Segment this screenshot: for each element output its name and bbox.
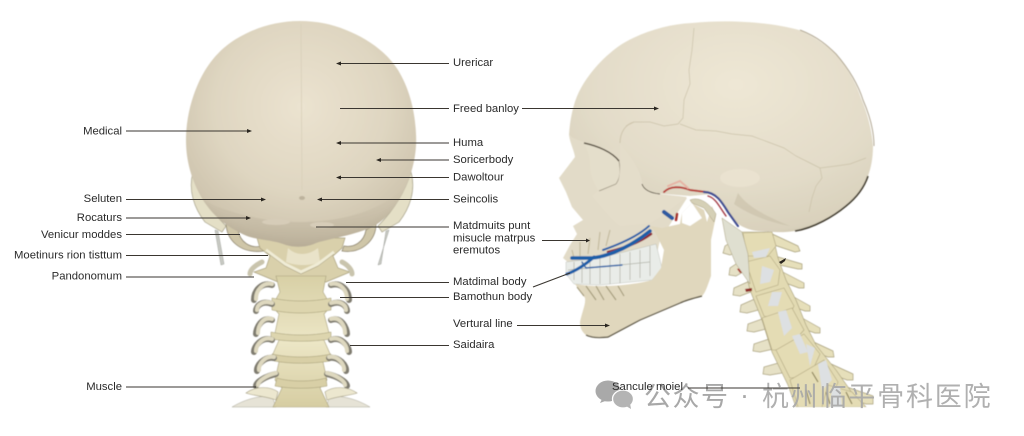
dark speckles at lower spine <box>806 372 852 404</box>
label: Medical: Medical <box>83 126 122 138</box>
left articular processes <box>722 244 782 376</box>
left transverse processes <box>246 284 278 400</box>
red vessel fragments <box>736 268 742 274</box>
label: Vertural line: Vertural line <box>453 318 513 330</box>
blood vessels <box>567 181 738 274</box>
vertebral column segments <box>740 232 862 407</box>
small arrow on spine <box>779 258 786 264</box>
label: Muscle: Muscle <box>86 381 122 393</box>
side view of skull with jaw, vessels and spine <box>559 21 874 407</box>
cervical spine, posterior view <box>232 276 370 407</box>
label: Rocaturs <box>77 212 251 224</box>
icon: wechat bubbles <box>596 380 634 409</box>
label: Soricerbody: Soricerbody <box>453 154 514 166</box>
watermark: 杭州临平骨科医院 <box>762 382 992 412</box>
vertebral column <box>272 276 331 407</box>
label: Seincolis: Seincolis <box>453 194 499 206</box>
intervertebral discs <box>272 298 331 313</box>
left labels, back view <box>14 126 268 393</box>
watermark text: 公众号 <box>644 382 730 412</box>
label: Rocaturs: Rocaturs <box>77 212 122 224</box>
right transverse processes <box>325 284 357 400</box>
spinous processes <box>765 232 873 404</box>
label: Urericar <box>336 57 493 69</box>
right styloid process <box>378 230 389 265</box>
skull, posterior view <box>186 21 416 247</box>
label: Moetinurs rion tisttum: Moetinurs rion tisttum <box>14 250 122 262</box>
label: Matdmuits punt misucle matrpus eremutos: eremutos <box>453 244 500 256</box>
label: Medical <box>83 126 252 138</box>
label: Pandonomum: Pandonomum <box>52 270 122 282</box>
label: Huma <box>336 137 484 149</box>
label: Matdimal body <box>346 273 570 288</box>
cervical spine, lateral view <box>723 232 873 407</box>
watermark <box>596 380 992 412</box>
watermark: · <box>740 380 749 410</box>
label: Huma: Huma <box>453 137 484 149</box>
label: Matdmuits punt misucle matrpus eremutos <box>316 220 590 256</box>
upper neck bone near the skull base <box>722 218 750 284</box>
label: Seluten <box>84 193 266 205</box>
label: Bamothun body: Bamothun body <box>453 291 532 303</box>
orbit <box>584 144 620 190</box>
label: Freed banloy: Freed banloy <box>453 103 519 115</box>
left mastoid strip <box>191 172 226 232</box>
left skull base loop <box>226 222 264 251</box>
label: Vertural line <box>453 318 610 330</box>
skull sutures <box>626 28 866 212</box>
shoulder arcs <box>232 396 276 407</box>
cheekbone <box>592 143 687 226</box>
label: Seincolis <box>317 194 499 206</box>
label: Saidaira: Saidaira <box>453 339 495 351</box>
label: Urericar: Urericar <box>453 57 493 69</box>
temporal ridge <box>620 122 634 143</box>
upper cervical vertebrae <box>250 238 352 282</box>
label: Venicur moddes: Venicur moddes <box>41 229 122 241</box>
label: Dawoltour <box>336 172 504 184</box>
label: Seluten: Seluten <box>84 193 122 205</box>
back view of skull and neck <box>186 21 416 407</box>
label: Matdmuits punt misucle matrpus eremutos: Matdmuits punt <box>453 220 531 232</box>
maxilla root lines <box>572 230 610 258</box>
label: Sancule moiel: Sancule moiel <box>612 381 683 393</box>
centre labels <box>316 57 800 393</box>
label: Soricerbody <box>376 154 514 166</box>
left styloid process <box>215 230 224 265</box>
label: Matdimal body: Matdimal body <box>453 276 527 288</box>
teeth <box>566 244 662 285</box>
right mastoid strip <box>378 172 413 232</box>
facial bones <box>559 135 687 264</box>
label: Matdmuits punt misucle matrpus eremutos: misucle matrpus <box>453 232 536 244</box>
mandible <box>575 199 716 338</box>
lamina blocks <box>743 232 776 256</box>
disc highlights <box>752 248 842 407</box>
right skull base loop <box>342 224 376 251</box>
cranium, lateral view <box>569 21 874 232</box>
label: Freed banloy <box>340 103 659 115</box>
label: Dawoltour: Dawoltour <box>453 172 504 184</box>
